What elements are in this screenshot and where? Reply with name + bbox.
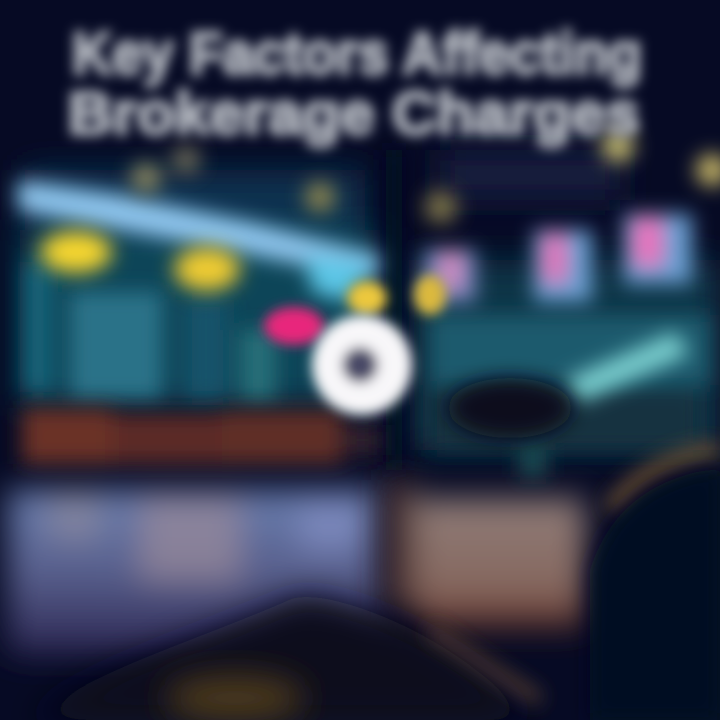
chart line: light blue band <box>18 180 380 302</box>
panel: lower reflection left <box>8 490 380 655</box>
icon: cyan diagonal bar <box>565 332 690 402</box>
panel: lower reflection right <box>385 480 585 628</box>
icons: pink and blue flags <box>424 214 692 302</box>
icons: yellow markers <box>40 130 720 291</box>
city backdrop <box>20 150 720 450</box>
title: Brokerage Charges <box>68 80 640 147</box>
icon: white dial <box>312 315 412 415</box>
panel: brown street band <box>22 408 380 464</box>
title: Key Factors Affecting <box>72 20 642 87</box>
silhouette: foreground bottom centre <box>30 595 540 720</box>
panel: right teal district <box>430 315 710 477</box>
title <box>68 20 642 147</box>
icons: coloured wedges around the dial <box>264 275 446 345</box>
silhouette: foreground bottom right <box>590 450 720 720</box>
panel: teal buildings <box>25 150 403 470</box>
icon: dark blob <box>448 378 572 438</box>
